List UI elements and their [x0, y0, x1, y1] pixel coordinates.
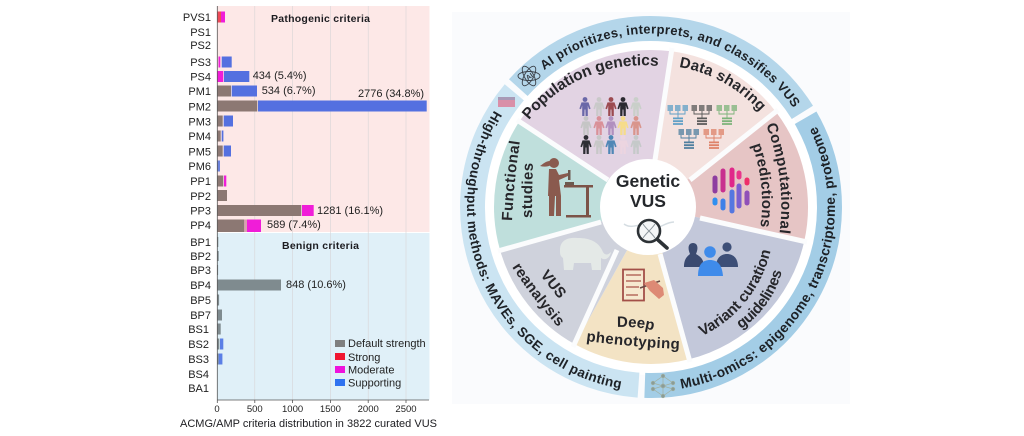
benign bars — [217, 237, 281, 364]
legend — [335, 338, 426, 390]
sector labels: Computational — [768, 123, 792, 234]
x-axis tick labels — [214, 404, 417, 415]
sector labels: Data sharing — [680, 57, 765, 112]
icon: VUS elephant — [560, 238, 611, 270]
sector labels: guidelines — [738, 270, 782, 330]
criteria labels: BP1 — [190, 237, 211, 249]
criteria labels: PM6 — [188, 161, 211, 173]
panel: Genetic VUS wheel — [460, 16, 842, 398]
x-axis tick labels: 500 — [247, 404, 263, 415]
criteria labels: BS2 — [188, 339, 209, 351]
criteria labels: PP2 — [190, 191, 211, 203]
criteria labels: BP7 — [190, 310, 211, 322]
criteria labels: PM3 — [188, 116, 211, 128]
icon: AI atom: AI — [525, 72, 535, 82]
icon: neural network — [651, 374, 675, 398]
criteria labels: BS3 — [188, 354, 209, 366]
center title: Genetic VUS: Genetic — [616, 171, 680, 191]
criteria labels: PP4 — [190, 220, 211, 232]
sector labels: Population genetics — [522, 54, 658, 120]
icon: high-throughput plate — [498, 97, 515, 107]
panel: pathogenic background — [217, 6, 430, 232]
sector labels: reanalysis — [512, 264, 562, 326]
sector: functional studies — [494, 122, 651, 250]
criteria labels: PS2 — [190, 40, 211, 52]
panel: bar chart of ACMG/AMP criteria — [180, 6, 437, 430]
value annotations: 534 (6.7%) — [262, 85, 316, 97]
center circle — [600, 159, 696, 255]
ring: AI prioritizes: AI prioritizes, interprets, and classifies VUS — [542, 25, 800, 107]
criteria labels: PM5 — [188, 146, 211, 158]
ring: multi-omics: Multi-omics: epigenome, transcriptome, proteome — [680, 127, 837, 388]
x-axis tick labels: 1500 — [320, 404, 341, 415]
center title: Genetic VUS: VUS — [630, 191, 666, 211]
value annotations: 434 (5.4%) — [253, 70, 307, 82]
icon: computational bars — [715, 170, 747, 211]
x-axis tick labels: 0 — [214, 404, 220, 415]
sector labels — [502, 54, 792, 352]
pathogenic bars — [217, 12, 427, 232]
x-axis title: ACMG/AMP criteria distribution in 3822 curated VUS — [180, 418, 437, 430]
sector: computational predictions — [651, 112, 808, 241]
legend: Default strength — [348, 338, 426, 350]
sector labels: Variant curation — [697, 250, 770, 334]
sector: VUS reanalysis — [500, 207, 651, 344]
sector labels: Functional — [502, 140, 520, 220]
value annotations: 1281 (16.1%) — [317, 205, 383, 217]
heading: benign criteria: Benign criteria — [282, 240, 359, 252]
criteria labels: PM2 — [188, 102, 211, 114]
value annotations: 2776 (34.8%) — [358, 88, 424, 100]
criteria labels: BS1 — [188, 324, 209, 336]
criteria labels: BP5 — [190, 295, 211, 307]
criteria labels: BP4 — [190, 280, 211, 292]
value annotations: 848 (10.6%) — [286, 279, 346, 291]
criteria labels: PM1 — [188, 86, 211, 98]
center title: Genetic VUS — [616, 171, 680, 211]
sector labels: predictions — [749, 144, 773, 227]
sector labels: studies — [521, 164, 533, 218]
criteria labels — [183, 12, 211, 395]
icon: magnifier over DNA — [624, 220, 674, 248]
icon: shared databases — [668, 105, 737, 149]
wheel panel background — [452, 12, 850, 404]
criteria labels: PVS1 — [183, 12, 211, 24]
criteria labels: BS4 — [188, 369, 209, 381]
icon: population figures — [579, 97, 642, 154]
criteria labels: PS4 — [190, 72, 211, 84]
icon: curation experts — [684, 242, 738, 276]
sector: variant curation guidelines — [651, 207, 804, 359]
ring: high-throughput methods: High-throughput methods: MAVEs, SGE, cell painting — [464, 111, 622, 391]
legend: Supporting — [348, 378, 401, 390]
value annotations: 589 (7.4%) — [267, 219, 321, 231]
sector: deep phenotyping — [575, 207, 689, 364]
criteria labels: BP2 — [190, 251, 211, 263]
sector labels: phenotyping — [586, 332, 679, 352]
criteria labels: PS1 — [190, 27, 211, 39]
legend: Strong — [348, 352, 380, 364]
criteria labels: BP3 — [190, 265, 211, 277]
sector: data sharing — [651, 51, 776, 207]
criteria labels: PM4 — [188, 131, 211, 143]
icon: functional studies scientist — [540, 158, 593, 218]
x-axis tick labels: 2000 — [358, 404, 379, 415]
legend: Moderate — [348, 364, 394, 376]
icon: AI atom — [518, 64, 540, 88]
criteria labels: PP3 — [190, 206, 211, 218]
sector labels: VUS — [542, 268, 566, 298]
panel: benign background — [217, 233, 430, 400]
sector labels: Deep — [618, 316, 654, 332]
criteria labels: PP1 — [190, 176, 211, 188]
sector: population genetics — [519, 50, 672, 207]
x-axis tick labels: 1000 — [282, 404, 303, 415]
axes — [217, 6, 429, 403]
x-axis tick labels: 2500 — [395, 404, 417, 415]
heading: pathogenic criteria: Pathogenic criteria — [271, 13, 370, 25]
criteria labels: PS3 — [190, 57, 211, 69]
icon: deep phenotyping clipboard and hand — [623, 270, 664, 300]
value annotations — [253, 70, 424, 291]
criteria labels: BA1 — [188, 383, 209, 395]
